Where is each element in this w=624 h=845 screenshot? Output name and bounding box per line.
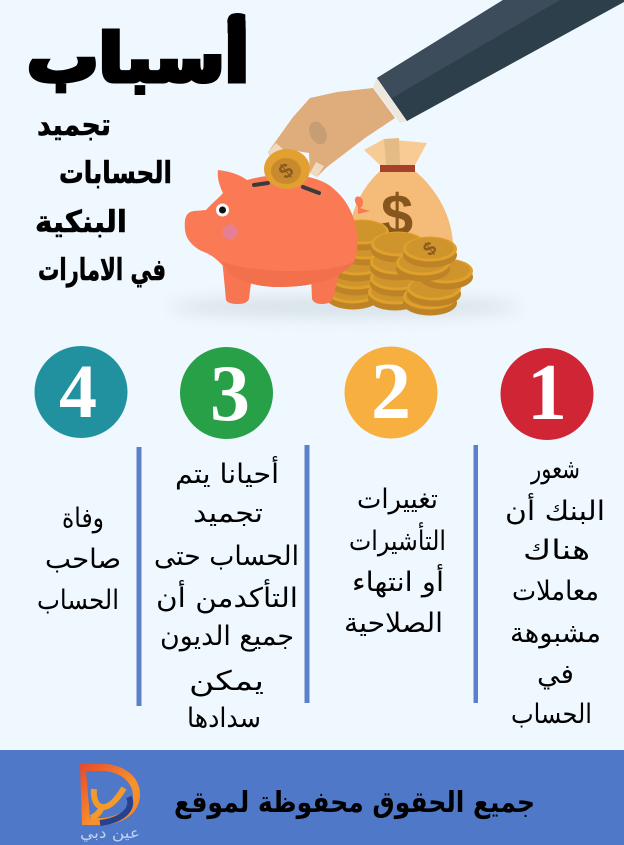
text: reason 2: الصلاحية (344, 608, 443, 639)
text: reason 3: أحيانا يتم (175, 455, 279, 490)
text: reason 1: مشبوهة (510, 618, 601, 649)
title: أسباب (27, 15, 249, 97)
icon: money bag (350, 138, 453, 262)
icon: money bag: $ (381, 183, 413, 248)
cheek (222, 224, 238, 240)
subtitle: تجميد (37, 108, 111, 143)
text: reason 1: شعور (529, 454, 580, 485)
step 2 circle (344, 346, 438, 438)
text: reason 3: تجميد (193, 498, 263, 529)
text: reason 2: التأشيرات (349, 521, 446, 557)
subtitle (35, 108, 172, 288)
step 4 circle (34, 346, 128, 438)
subtitle: في الامارات (38, 253, 166, 288)
text: reason 1 (505, 454, 605, 730)
text: reason 3: يمكن (189, 666, 264, 697)
icon: coin in hand (264, 149, 310, 189)
subtitle: الحسابات (59, 156, 172, 191)
text: reason 3: التأكدمن أن (156, 578, 298, 614)
illustration: hand, piggy bank and money (170, 0, 624, 317)
text: reason 2: أو انتهاء (352, 563, 444, 598)
ground shadow (170, 297, 520, 317)
icon: piggy bank (185, 170, 370, 304)
icon: hand (268, 88, 395, 177)
icon: suit arm (373, 0, 624, 123)
text: reason 3: جميع الديون (160, 621, 294, 652)
text: reason 1: معاملات (512, 576, 599, 607)
text: reason 2 (344, 484, 446, 639)
text: reason 4: الحساب (37, 585, 119, 616)
text: reason 4: وفاة (62, 503, 104, 534)
step 2 circle: 2 (371, 348, 411, 436)
footer band (0, 750, 624, 845)
text: reason 4 (37, 503, 121, 616)
eye (216, 204, 229, 216)
icon: coin stacks (326, 220, 473, 316)
text: reason 1: في (537, 659, 574, 690)
icon: coin in hand: $ (274, 159, 298, 184)
icon: coin stacks: $ (420, 238, 441, 261)
text: reason 3 (154, 455, 299, 734)
text: reason 1: البنك أن (505, 492, 605, 527)
step 3 circle: 3 (210, 350, 250, 438)
step 3 circle (180, 347, 273, 439)
step 1 circle (500, 348, 594, 440)
logo: عين دبي (80, 824, 140, 843)
subtitle: البنكية (35, 205, 127, 240)
text: reason 1: هناك (523, 535, 590, 566)
text: reason 1: الحساب (511, 699, 592, 730)
text: reason 2: تغييرات (357, 484, 438, 515)
text: reason 4: صاحب (45, 544, 121, 575)
step 4 circle: 4 (59, 350, 97, 434)
logo (80, 764, 140, 843)
text: reason 3: سدادها (187, 703, 261, 734)
footer text: جميع الحقوق محفوظة لموقع (174, 785, 535, 819)
text: reason 3: الحساب حتى (154, 541, 299, 572)
step 1 circle: 1 (527, 349, 567, 437)
